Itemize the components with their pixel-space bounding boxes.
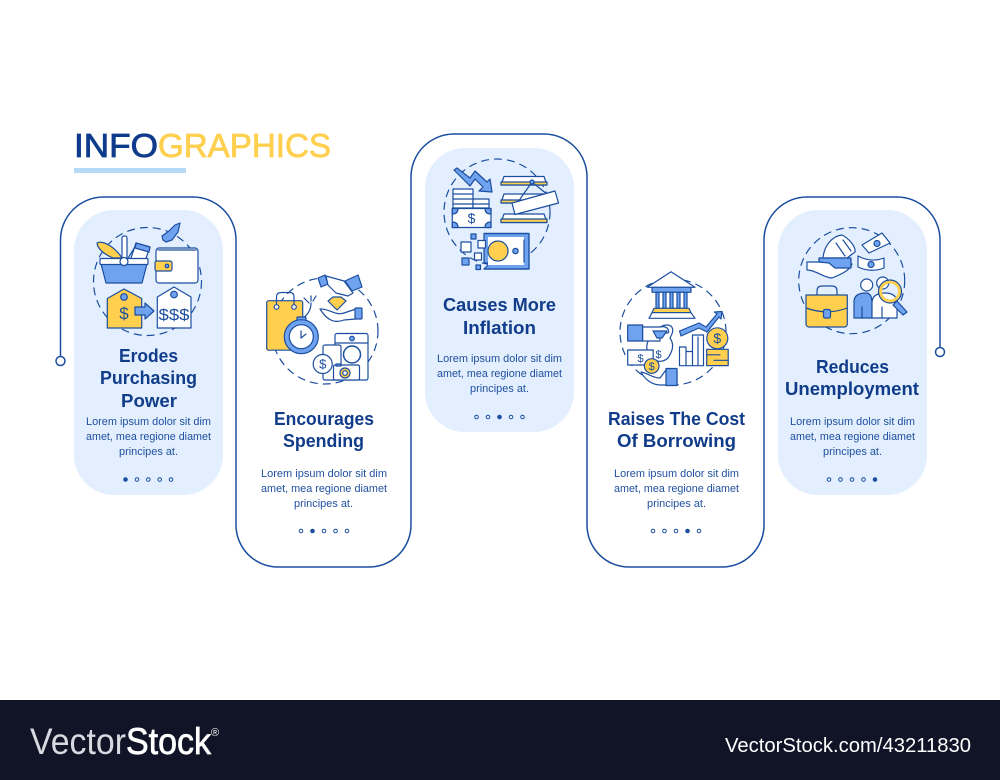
logo: Vector xyxy=(30,721,126,762)
heading: Purchasing xyxy=(100,367,197,388)
body text: amet, mea regione diamet xyxy=(261,483,387,495)
body text: amet, mea regione diamet xyxy=(437,368,562,380)
logo xyxy=(30,721,219,762)
heading xyxy=(274,408,374,451)
icon: bank, money bag, chart, coins: $ xyxy=(649,361,655,373)
body text: Lorem ipsum dolor sit dim xyxy=(86,416,211,428)
step 4: raises the cost of borrowing xyxy=(608,272,745,533)
title: INFO xyxy=(74,127,158,164)
body text xyxy=(86,416,211,458)
winding outline connecting the five steps xyxy=(56,134,944,567)
body text: amet, mea regione diamet xyxy=(790,431,915,443)
heading: Reduces xyxy=(816,356,889,377)
icon: falling arrow, gold bars, dissolving banknote: $ xyxy=(468,210,476,226)
image id: VectorStock.com/43211830 xyxy=(725,735,971,757)
icon: bank, money bag, chart, coins xyxy=(620,272,728,386)
heading: Encourages xyxy=(274,408,374,429)
logo: ® xyxy=(211,727,219,739)
icon: falling arrow, gold bars, dissolving banknote xyxy=(444,159,558,270)
panel: causes more inflation background xyxy=(425,148,574,432)
heading: Erodes xyxy=(119,345,178,366)
heading xyxy=(608,408,745,451)
body text: amet, mea regione diamet xyxy=(614,483,739,495)
step 2: encourages spending xyxy=(261,275,387,533)
body text: Lorem ipsum dolor sit dim xyxy=(261,468,387,480)
body text: Lorem ipsum dolor sit dim xyxy=(437,353,562,365)
icon: shopping bag, stopwatch, diamond, appliances xyxy=(267,275,378,384)
icon: bank, money bag, chart, coins: $ xyxy=(713,330,721,346)
body text: Lorem ipsum dolor sit dim xyxy=(790,416,915,428)
icon: hands with cash, briefcase, people and magnifier xyxy=(799,228,907,334)
icon: basket, wallet, price tags: $$$ xyxy=(158,307,190,324)
heading xyxy=(785,356,919,399)
footer bar xyxy=(0,700,1000,780)
heading: Power xyxy=(121,390,177,411)
step 1: erodes purchasing power xyxy=(86,223,211,481)
body text: amet, mea regione diamet xyxy=(86,431,211,443)
body text xyxy=(261,468,387,510)
pagination dots xyxy=(124,478,173,481)
body text: Lorem ipsum dolor sit dim xyxy=(614,468,739,480)
panel: reduces unemployment background xyxy=(778,210,927,495)
body text: principes at. xyxy=(647,498,706,510)
icon: basket, wallet, price tags: $ xyxy=(119,304,129,323)
title: GRAPHICS xyxy=(158,127,331,164)
body text xyxy=(614,468,739,510)
body text: principes at. xyxy=(294,498,353,510)
icon: bank, money bag, chart, coins: $ xyxy=(655,349,662,361)
body text: principes at. xyxy=(119,446,178,458)
logo: Stock xyxy=(126,721,211,762)
body text xyxy=(790,416,915,458)
heading xyxy=(443,294,556,338)
pagination dots xyxy=(651,529,701,533)
step 5: reduces unemployment xyxy=(785,228,919,481)
panel: erodes purchasing power background xyxy=(74,210,223,495)
pagination dots xyxy=(827,478,877,481)
pagination dots xyxy=(299,529,349,533)
heading: Spending xyxy=(283,430,364,451)
body text: principes at. xyxy=(470,383,529,395)
icon: shopping bag, stopwatch, diamond, appliances: $ xyxy=(319,356,327,372)
heading xyxy=(100,345,197,411)
heading: Of Borrowing xyxy=(617,430,736,451)
body text: principes at. xyxy=(823,446,882,458)
title xyxy=(74,127,331,173)
icon: bank, money bag, chart, coins: $ xyxy=(637,353,644,365)
pagination dots xyxy=(475,415,524,419)
heading: Unemployment xyxy=(785,378,919,399)
step 3: causes more inflation xyxy=(437,159,562,419)
body text xyxy=(437,353,562,395)
heading: Causes More xyxy=(443,294,556,315)
icon: basket, wallet, price tags xyxy=(94,223,202,336)
heading: Inflation xyxy=(463,317,536,338)
heading: Raises The Cost xyxy=(608,408,745,429)
